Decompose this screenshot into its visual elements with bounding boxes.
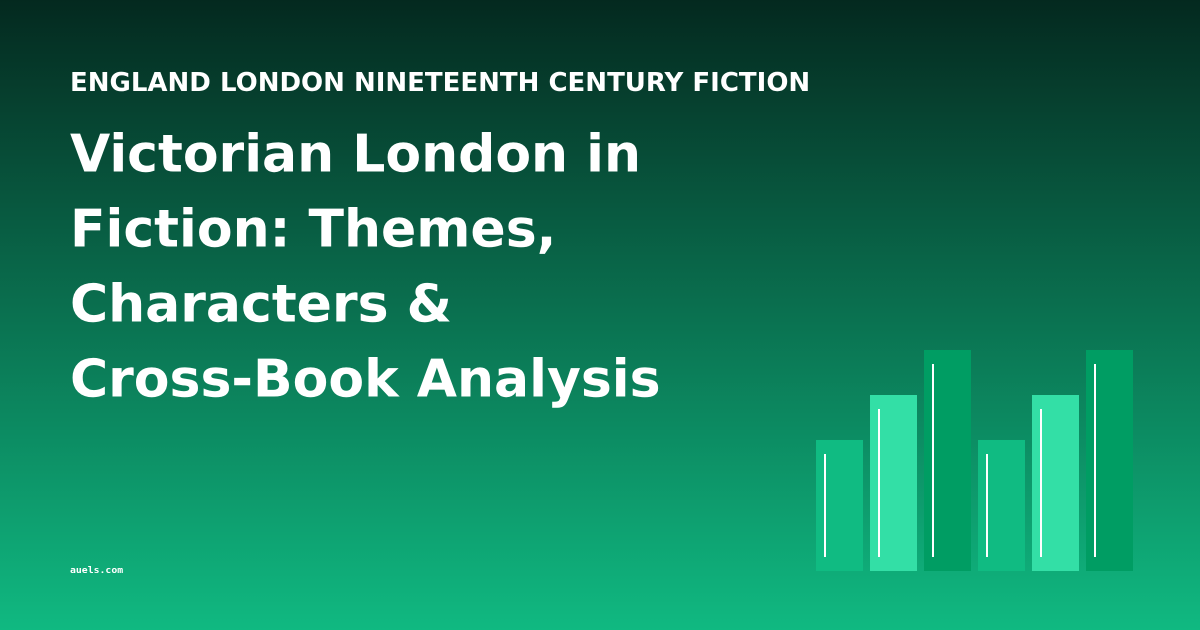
title: Fiction: Themes, bbox=[70, 200, 556, 260]
eyebrow heading: ENGLAND LONDON NINETEENTH CENTURY FICTION bbox=[70, 68, 810, 98]
title bbox=[70, 125, 661, 410]
title: Cross-Book Analysis bbox=[70, 350, 661, 410]
title: Characters & bbox=[70, 275, 452, 335]
title: Victorian London in bbox=[70, 125, 641, 185]
brand label: auels.com bbox=[70, 566, 123, 576]
icon: decorative bar chart of books bbox=[816, 350, 1133, 571]
